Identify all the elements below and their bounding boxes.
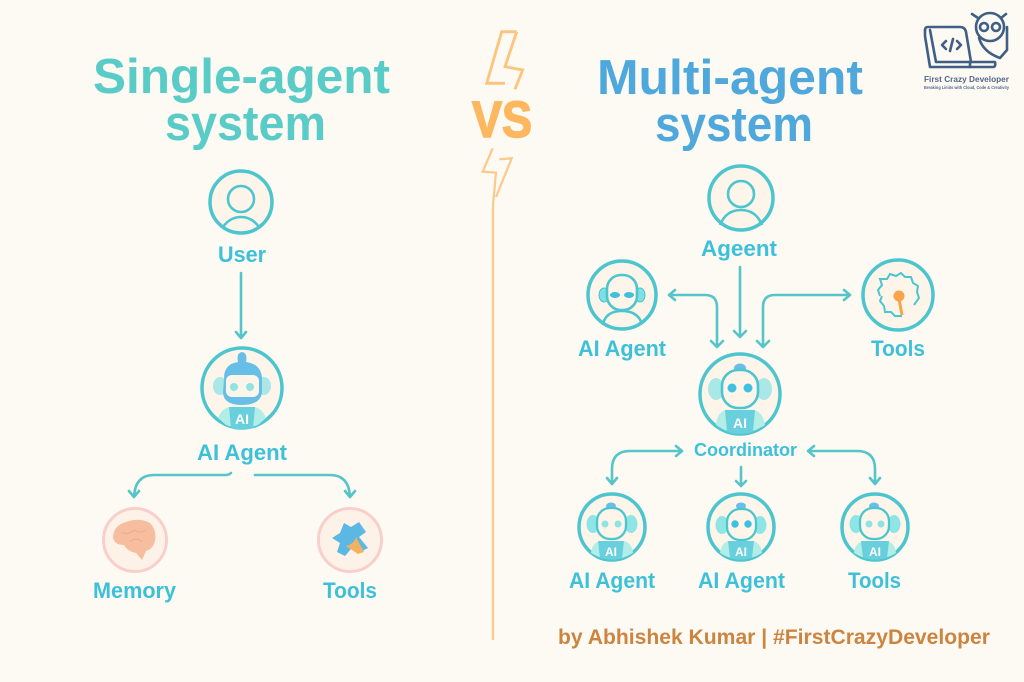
icon: top lightning bolt [487, 32, 523, 89]
title: single-agent system: Single-agent [93, 50, 390, 104]
label: Ageent: Ageent [701, 236, 778, 261]
icon: user [210, 171, 272, 233]
arrow: AI agent to memory [129, 473, 231, 497]
icon: coordinator robot [700, 354, 780, 434]
arrow: user to AI agent [236, 273, 246, 338]
icon: lower left AI agent [579, 494, 645, 560]
label: AI Agent, single-agent panel: AI Agent [197, 440, 288, 465]
icon: agent user, multi-agent panel [709, 166, 773, 230]
icon: AI agent, upper left [588, 261, 656, 329]
label: Tools, single-agent panel: Tools [323, 578, 377, 603]
icon: tools, single-agent panel [318, 508, 382, 572]
icon: lower centre AI agent [708, 494, 774, 560]
title: multi-agent system: system [655, 98, 813, 152]
arrow: coordinator to lower left agent [607, 446, 682, 484]
arrow: AI agent to coordinator, two-way [669, 290, 723, 347]
title: multi-agent system: Multi-agent [597, 51, 863, 105]
logo: First Crazy Developer [924, 13, 1009, 90]
label: lower centre AI Agent: AI Agent [698, 568, 786, 593]
title: multi-agent system [597, 51, 863, 152]
icon: tools, upper right [863, 260, 933, 330]
arrow: coordinator to lower centre agent [736, 467, 746, 486]
credit line: by Abhishek Kumar | #FirstCrazyDeveloper [558, 626, 990, 649]
title: single-agent system [93, 50, 390, 151]
arrow: AI agent to tools [255, 475, 355, 497]
label: User: User [218, 242, 266, 267]
label: Tools, upper right: Tools [871, 336, 925, 361]
icon: lower right tools robot: AI [869, 545, 881, 559]
label: lower left AI Agent: AI Agent [569, 568, 656, 593]
icon: lower right tools robot [842, 494, 908, 560]
label: Coordinator: Coordinator [694, 440, 797, 460]
label: Memory: Memory [93, 578, 177, 603]
label: AI Agent, upper left: AI Agent [578, 336, 667, 361]
arrow: tools to coordinator, two-way [757, 290, 850, 347]
title: single-agent system: system [165, 97, 326, 151]
icon: coordinator robot: AI [733, 415, 747, 431]
icon: lower centre AI agent: AI [735, 545, 747, 559]
icon: lower left AI agent: AI [605, 545, 617, 559]
arrow: coordinator to lower right tools [808, 446, 880, 484]
icon: AI agent, single-agent panel [202, 348, 282, 430]
VS label: VS [472, 91, 532, 148]
label: lower right Tools: Tools [848, 568, 901, 593]
icon: memory brain [104, 508, 166, 572]
arrow: agent to coordinator [734, 267, 746, 337]
logo: First Crazy Developer: Breaking Limits with Cloud, Code & Creativity [924, 85, 1009, 90]
logo: First Crazy Developer: First Crazy Developer [924, 75, 1009, 84]
icon: AI agent, single-agent panel: AI [235, 411, 249, 427]
divider with lower lightning bolt [483, 148, 512, 640]
